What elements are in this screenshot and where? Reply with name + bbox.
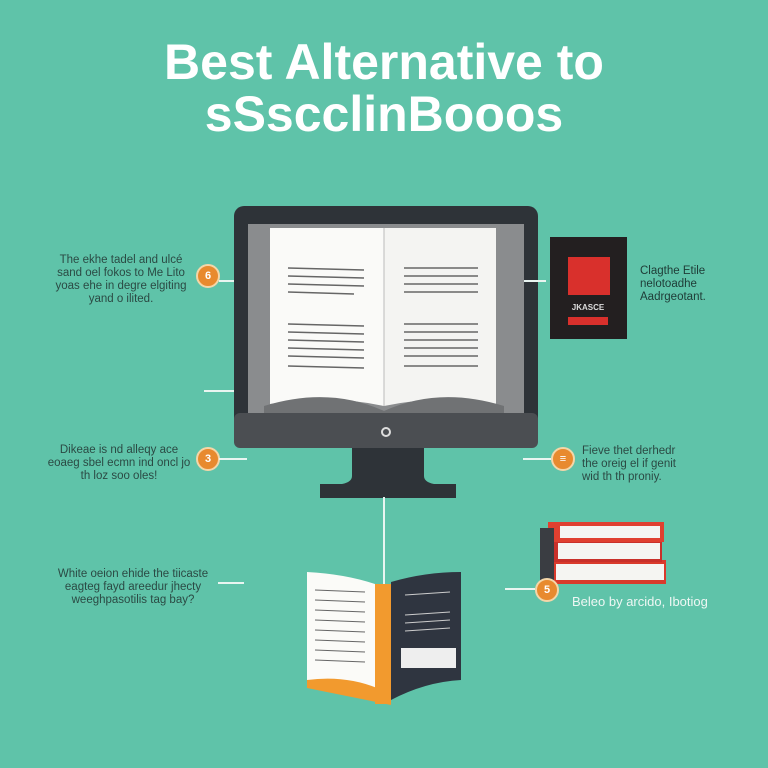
callout 6: Beleo by arcido, Ibotiog [572,594,708,609]
open book [307,572,461,705]
callout 2: Dikeae is nd alleqy ace eoaeg sbel ecmn ind oncl jo th loz soo oles! [48,444,190,482]
title [164,34,604,142]
marker 1 [196,264,220,288]
marker 4: ≡ [560,453,566,465]
callout 3: Clagthe Etile nelotoadhe Aadrgeotant. [640,265,706,303]
marker 5: 5 [544,584,550,596]
callout 5: White oeion ehide the tiicaste eagteg fayd areedur jhecty weeghpasotilis tag bay? [58,568,208,606]
stacked books [540,522,666,584]
marker 2: 3 [205,453,211,465]
arrow [524,280,546,282]
marker 2 [196,447,220,471]
marker 5 [535,578,559,602]
book on screen [270,228,384,406]
callout 1: The ekhe tadel and ulcé sand oel fokos to Me Lito yoas ehe in degre elgiting yand o ilited. [55,254,187,305]
title: sSscclinBooos [205,86,563,142]
book cover [550,237,627,339]
callout 4: Fieve thet derhedr the oreig el if genit wid th th proniy. [582,445,676,483]
book cover: JKASCE [572,303,604,312]
marker 1: 6 [205,270,211,282]
title: Best Alternative to [164,34,604,90]
connector line [383,497,385,615]
marker 4 [551,447,575,471]
monitor [234,206,538,498]
